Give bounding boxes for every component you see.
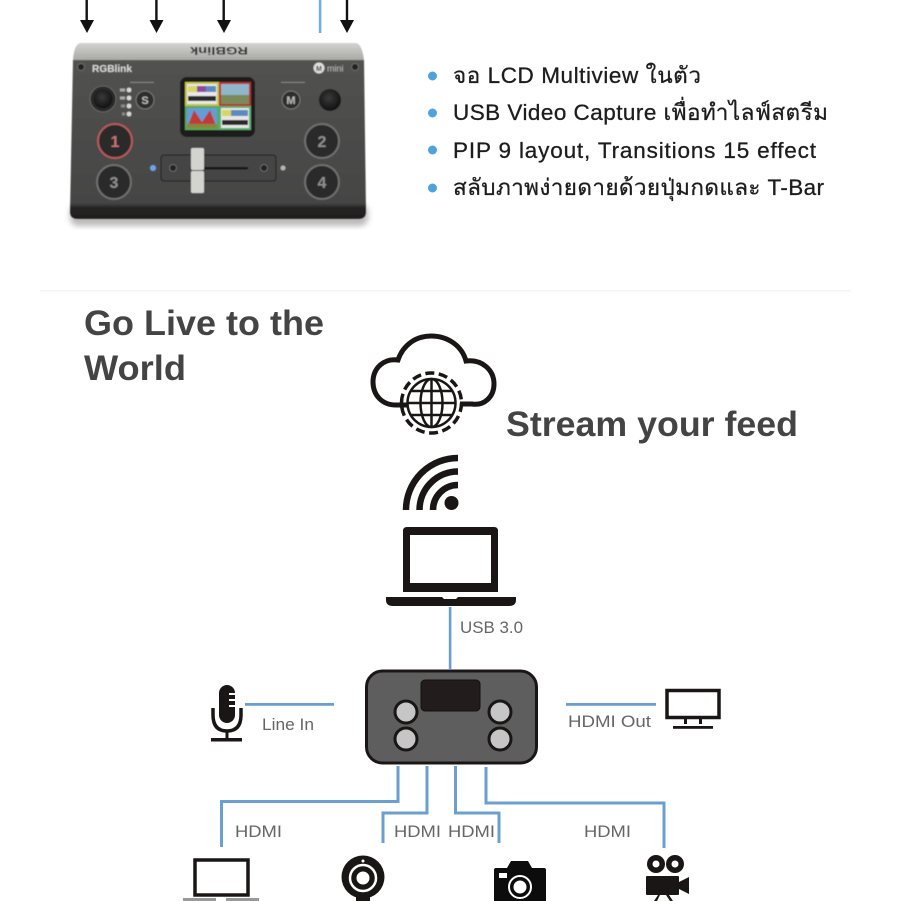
heading: Go Live to the World: World [84,349,186,388]
feature list [428,63,828,201]
switcher buttons [395,701,511,750]
label: Line In: Line In [262,715,314,734]
connector: webcam [383,766,427,843]
pane 2 [219,82,251,106]
connector: video camera [486,767,664,848]
right knob [319,89,341,111]
heading: Go Live to the World [84,304,324,388]
icon: wifi [406,458,458,510]
feature text 3: PIP 9 layout, Transitions 15 effect [453,138,817,163]
button 4: 4 [318,175,327,192]
icon: laptop source [183,860,259,901]
icon: webcam [342,856,384,901]
blue connector line [319,0,321,33]
icon: video camera [646,855,689,901]
RGBlink logo: RGBlink [92,63,132,75]
icon: cloud with globe [373,336,494,433]
feature text 4: สลับภาพง่ายดายด้วยปุ่มกดและ T-Bar [453,175,824,201]
text: Stream your feed: Stream your feed [506,405,798,444]
feature text 1: จอ LCD Multiview ในตัว [453,63,701,88]
device body [70,60,366,219]
button 3 [97,165,131,199]
button 3: 3 [110,175,119,192]
arrow 1 [80,0,94,33]
bullet 3 [428,146,437,154]
MENU divider [281,81,305,84]
label: USB 3.0: USB 3.0 [460,618,523,637]
blue LED [150,165,156,171]
switcher diagram icon [366,671,536,763]
arrow 4 [340,0,354,33]
feature text 2: USB Video Capture เพื่อทำไลฟ์สตรีม [453,96,828,125]
device top logo (mirrored): RGBlink [189,44,248,56]
mini logo [314,62,344,74]
status LEDs [120,88,131,116]
icon: monitor [667,690,719,729]
arrows above the device [80,0,354,33]
bullet 4 [428,184,437,192]
arrow 3 [217,0,231,33]
S button [136,91,154,109]
device shadow [70,204,368,226]
T-bar slider [161,148,276,193]
label: HDMI Out: HDMI Out [568,712,651,731]
pane 3 [185,106,219,130]
heading: Go Live to the World: Go Live to the [84,304,324,343]
S button: S [141,95,149,107]
device top edge [73,43,364,60]
HDMI labels [235,822,631,841]
button 2 [305,124,339,158]
LCD multiview screen [180,77,255,137]
mini logo: mini [327,64,344,74]
arrow 2 [150,0,164,33]
screws [78,64,358,70]
white LED [280,166,286,170]
icon: streaming laptop [386,527,516,606]
HDMI labels: HDMI [394,822,441,841]
connector: HDMI Out [566,703,656,706]
HDMI labels: HDMI [448,822,495,841]
M button: M [286,95,296,107]
button 1: 1 [111,134,120,151]
M button [282,91,300,109]
bullet 2 [428,108,437,118]
HDMI labels: HDMI [235,822,282,841]
HDMI connector lines [222,766,664,848]
icon: microphone [211,685,242,742]
bullet 1 [428,72,437,80]
button 4 [305,165,339,199]
connector: camera [456,766,499,843]
switcher screen [421,680,480,711]
connector: laptop [222,766,398,847]
button 2: 2 [318,134,327,151]
icon: photo camera [494,861,546,901]
mini logo: M [316,66,322,73]
SET divider [130,81,154,84]
HDMI labels: HDMI [584,822,631,841]
pane 4 [219,106,251,130]
pane 1 [185,82,219,106]
connector: USB 3.0 [449,607,451,669]
connector: Line In [245,703,334,706]
device: RGBlink mini switcher [70,43,368,226]
left knob [90,86,116,112]
button 1 [98,124,132,158]
